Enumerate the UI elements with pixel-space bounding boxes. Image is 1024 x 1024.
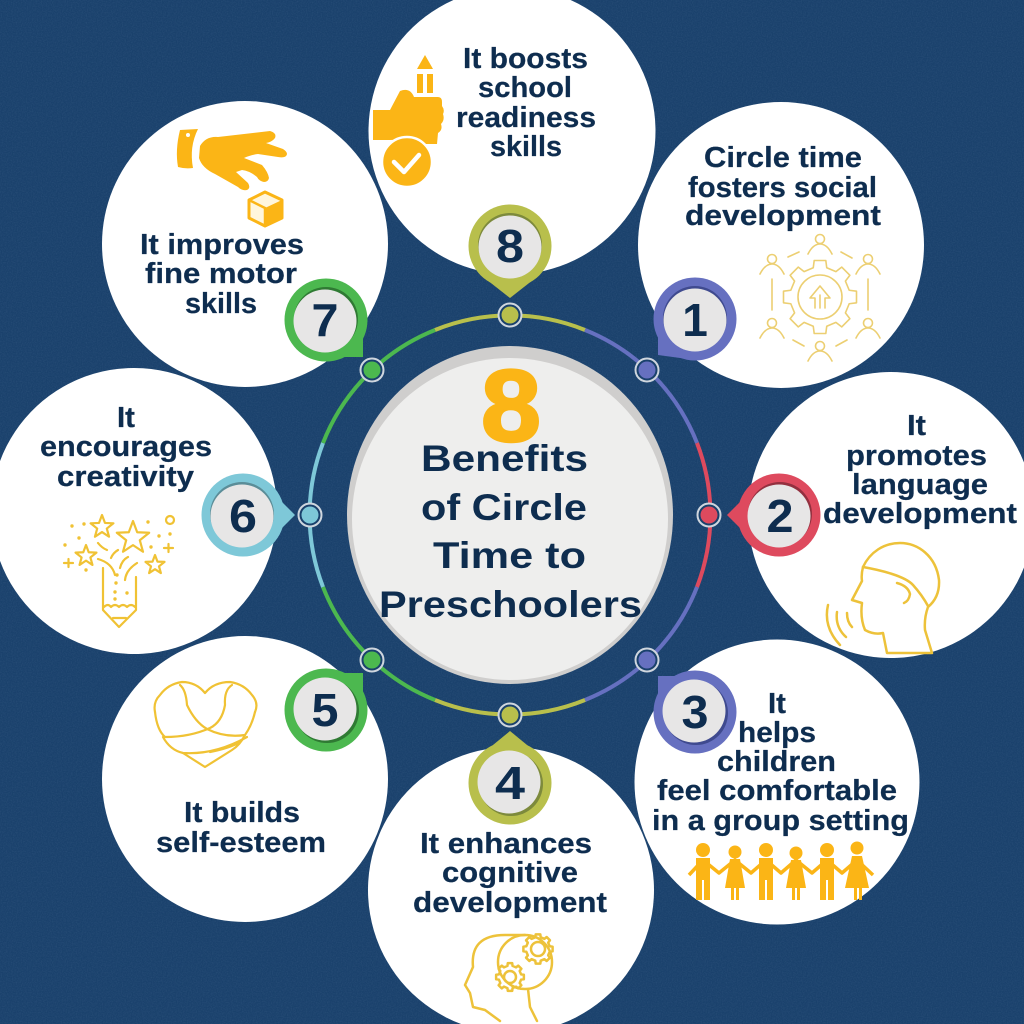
text: benefit 3: children (717, 746, 836, 778)
icon: speaking head (827, 543, 939, 653)
text: benefit 2: promotes (846, 440, 987, 472)
pin: number 1 (654, 278, 736, 360)
icon: hand with pencil and check (373, 55, 444, 187)
panel: benefit 2 circle (748, 372, 1024, 658)
pin: number 7 (284, 278, 368, 362)
pin: number 8 (468, 204, 552, 298)
pin: number 5: 5 (312, 684, 338, 736)
text: benefit 7: fine motor (145, 258, 297, 290)
pin: number 7: 7 (312, 294, 338, 346)
pin: number 6 (202, 474, 295, 556)
text: benefit 3: It (768, 688, 786, 720)
text: benefit 6: creativity (57, 461, 194, 493)
text: benefit 7: It improves (140, 229, 304, 261)
text: benefit 1: development (685, 200, 881, 232)
text: benefit 3: in a group setting (652, 805, 909, 837)
text: benefit 4: cognitive (442, 857, 578, 889)
text: benefit 3: feel comfortable (657, 775, 897, 807)
panel: benefit 1 circle (638, 102, 924, 388)
pin: number 4 (468, 731, 552, 824)
text: benefit 4: It enhances (420, 828, 592, 860)
text: benefit 3 (652, 688, 909, 837)
text: benefit 6 (40, 402, 212, 493)
text: benefit 2: It (907, 410, 926, 442)
panel: benefit 7 circle (102, 101, 388, 387)
panel: central disc (347, 346, 673, 684)
pin: number 5 (284, 668, 368, 752)
text: benefit 2 (823, 410, 1017, 530)
pin: number 2: 2 (766, 490, 794, 542)
icon: heart hug (155, 682, 256, 767)
text: benefit 6: It (117, 402, 135, 434)
title: Preschoolers (379, 584, 642, 625)
text: benefit 5: self-esteem (156, 827, 326, 859)
text: benefit 8: skills (490, 131, 562, 163)
text: benefit 8: school (478, 72, 572, 104)
pin: number 4: 4 (495, 757, 525, 809)
big number 8: 8 (481, 349, 541, 463)
text: benefit 7: skills (185, 288, 257, 320)
icon: hand and cube (177, 129, 287, 226)
title: Benefits (421, 438, 588, 479)
title: of Circle (421, 487, 587, 528)
text: benefit 2: language (852, 469, 988, 501)
panel: benefit 3 circle (634, 640, 920, 924)
segmented ring (310, 315, 710, 715)
icon: children holding hands (689, 842, 873, 900)
icon: head with gears (465, 934, 553, 1021)
pin: number 8: 8 (496, 220, 524, 272)
panel: benefit 6 circle (0, 368, 277, 654)
text: benefit 8 (456, 43, 596, 163)
text: benefit 7 (140, 229, 304, 320)
ring nodes (298, 304, 720, 726)
panel: benefit 8 circle (368, 0, 656, 274)
text: benefit 3: helps (738, 717, 816, 749)
text: benefit 5: It builds (184, 797, 300, 829)
text: benefit 1 (685, 142, 881, 232)
pin: number 3: 3 (682, 686, 708, 738)
pin: number 2 (727, 474, 820, 556)
text: benefit 6: encourages (40, 431, 212, 463)
text: benefit 5 (156, 797, 326, 859)
text: benefit 4 (413, 828, 607, 919)
pin: number 3 (654, 670, 736, 754)
icon: pencil with stars (63, 515, 174, 627)
text: benefit 8: It boosts (463, 43, 588, 75)
text: benefit 4: development (413, 887, 607, 919)
icon: gear and people network (760, 234, 880, 361)
text: benefit 1: fosters social (688, 172, 877, 204)
pin: number 6: 6 (229, 490, 257, 542)
pin: number 1: 1 (682, 294, 708, 346)
title: Time to (433, 535, 586, 576)
panel: benefit 5 circle (102, 636, 388, 922)
text: benefit 8: readiness (456, 102, 596, 134)
title (379, 438, 642, 625)
text: benefit 2: development (823, 498, 1017, 530)
text: benefit 1: Circle time (704, 142, 862, 174)
panel: benefit 4 circle (368, 747, 654, 1024)
